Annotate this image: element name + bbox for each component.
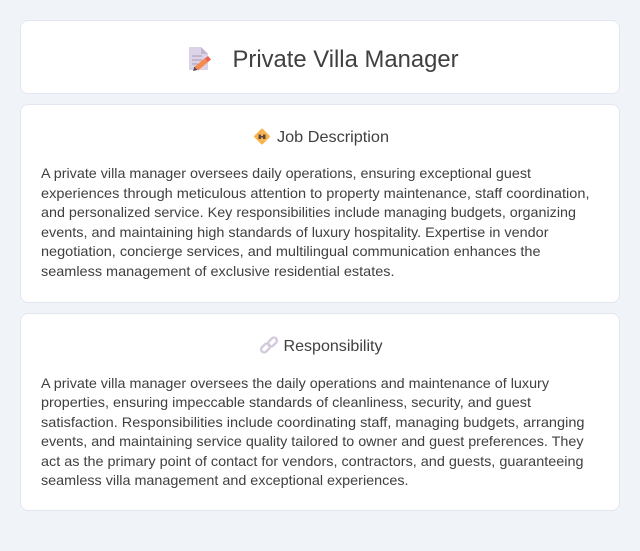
panel: title card [20, 20, 620, 94]
text block: job description: and personalized service. Key responsibilities include managing budgets, organizing [41, 204, 576, 220]
heading: job description: Job Description [277, 129, 389, 146]
text block: job description: events, and maintaining high standards of luxury hospitality. Expertise in vendor [41, 224, 549, 240]
heading: responsibility: Responsibility [284, 338, 382, 355]
title: Private Villa Manager [232, 46, 459, 73]
text block: job description: negotiation, concierge services, and multilingual communication enhances the [41, 243, 541, 259]
icon: document with pencil [189, 47, 211, 71]
text block: responsibility: properties, ensuring impeccable standards of cleanliness, security, and guest [41, 394, 531, 410]
text block: job description: A private villa manager oversees daily operations, ensuring exceptional guest [41, 165, 531, 181]
text block: job description: seamless management of exclusive residential estates. [41, 263, 394, 279]
panel: responsibility [20, 313, 620, 511]
icon: chain link [260, 336, 278, 354]
text block: responsibility: events, and maintaining service quality tailored to owner and guest preferences. They [41, 433, 584, 449]
text block: responsibility: satisfaction. Responsibilities include coordinating staff, managing budgets, arranging [41, 414, 584, 430]
text block: responsibility [41, 375, 584, 488]
text block: responsibility: act as the primary point of contact for vendors, contractors, and guests, guaranteeing [41, 453, 584, 469]
icon: diamond sign [255, 130, 269, 144]
text block: job description: experiences through meticulous attention to property maintenance, staff coordination, [41, 185, 590, 201]
text block: job description [41, 165, 590, 279]
panel: job description [20, 104, 620, 303]
text block: responsibility: A private villa manager oversees the daily operations and maintenance of luxury [41, 375, 549, 391]
text block: responsibility: seamless villa management and exceptional experiences. [41, 472, 409, 488]
